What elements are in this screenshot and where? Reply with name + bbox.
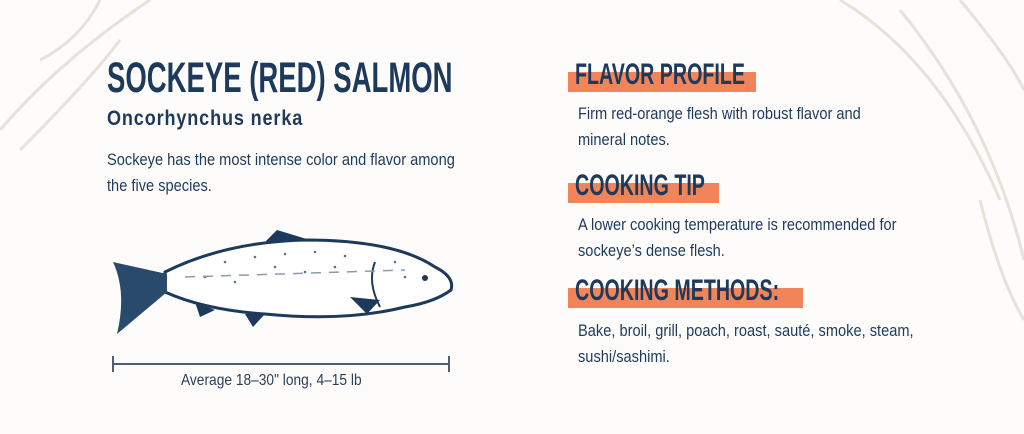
section: cooking methods: COOKING METHODS: [575,274,779,307]
section: cooking methods [568,274,914,366]
subtitle: scientific name: Oncorhynchus nerka [107,107,303,130]
section: flavor profile: FLAVOR PROFILE [575,58,745,91]
section: flavor profile [568,58,861,149]
description text: Sockeye has the most intense color and flavor among [107,150,455,169]
section: cooking tip: A lower cooking temperature is recommended for [578,215,897,234]
description text [107,150,455,195]
size scale line [112,356,450,372]
fish illustration [113,230,454,334]
description text: the five species. [107,176,212,195]
section: cooking tip: sockeye’s dense flesh. [578,241,725,260]
section: cooking methods: Bake, broil, grill, poach, roast, sauté, smoke, steam, [578,321,914,340]
section: cooking tip [568,169,897,260]
title: SOCKEYE (RED) SALMON [107,54,453,102]
section: cooking methods: sushi/sashimi. [578,347,670,366]
section: flavor profile: mineral notes. [578,130,670,149]
section: cooking tip: COOKING TIP [575,169,705,202]
section: flavor profile: Firm red-orange flesh with robust flavor and [578,104,861,123]
size caption: Average 18–30" long, 4–15 lb [181,372,362,389]
